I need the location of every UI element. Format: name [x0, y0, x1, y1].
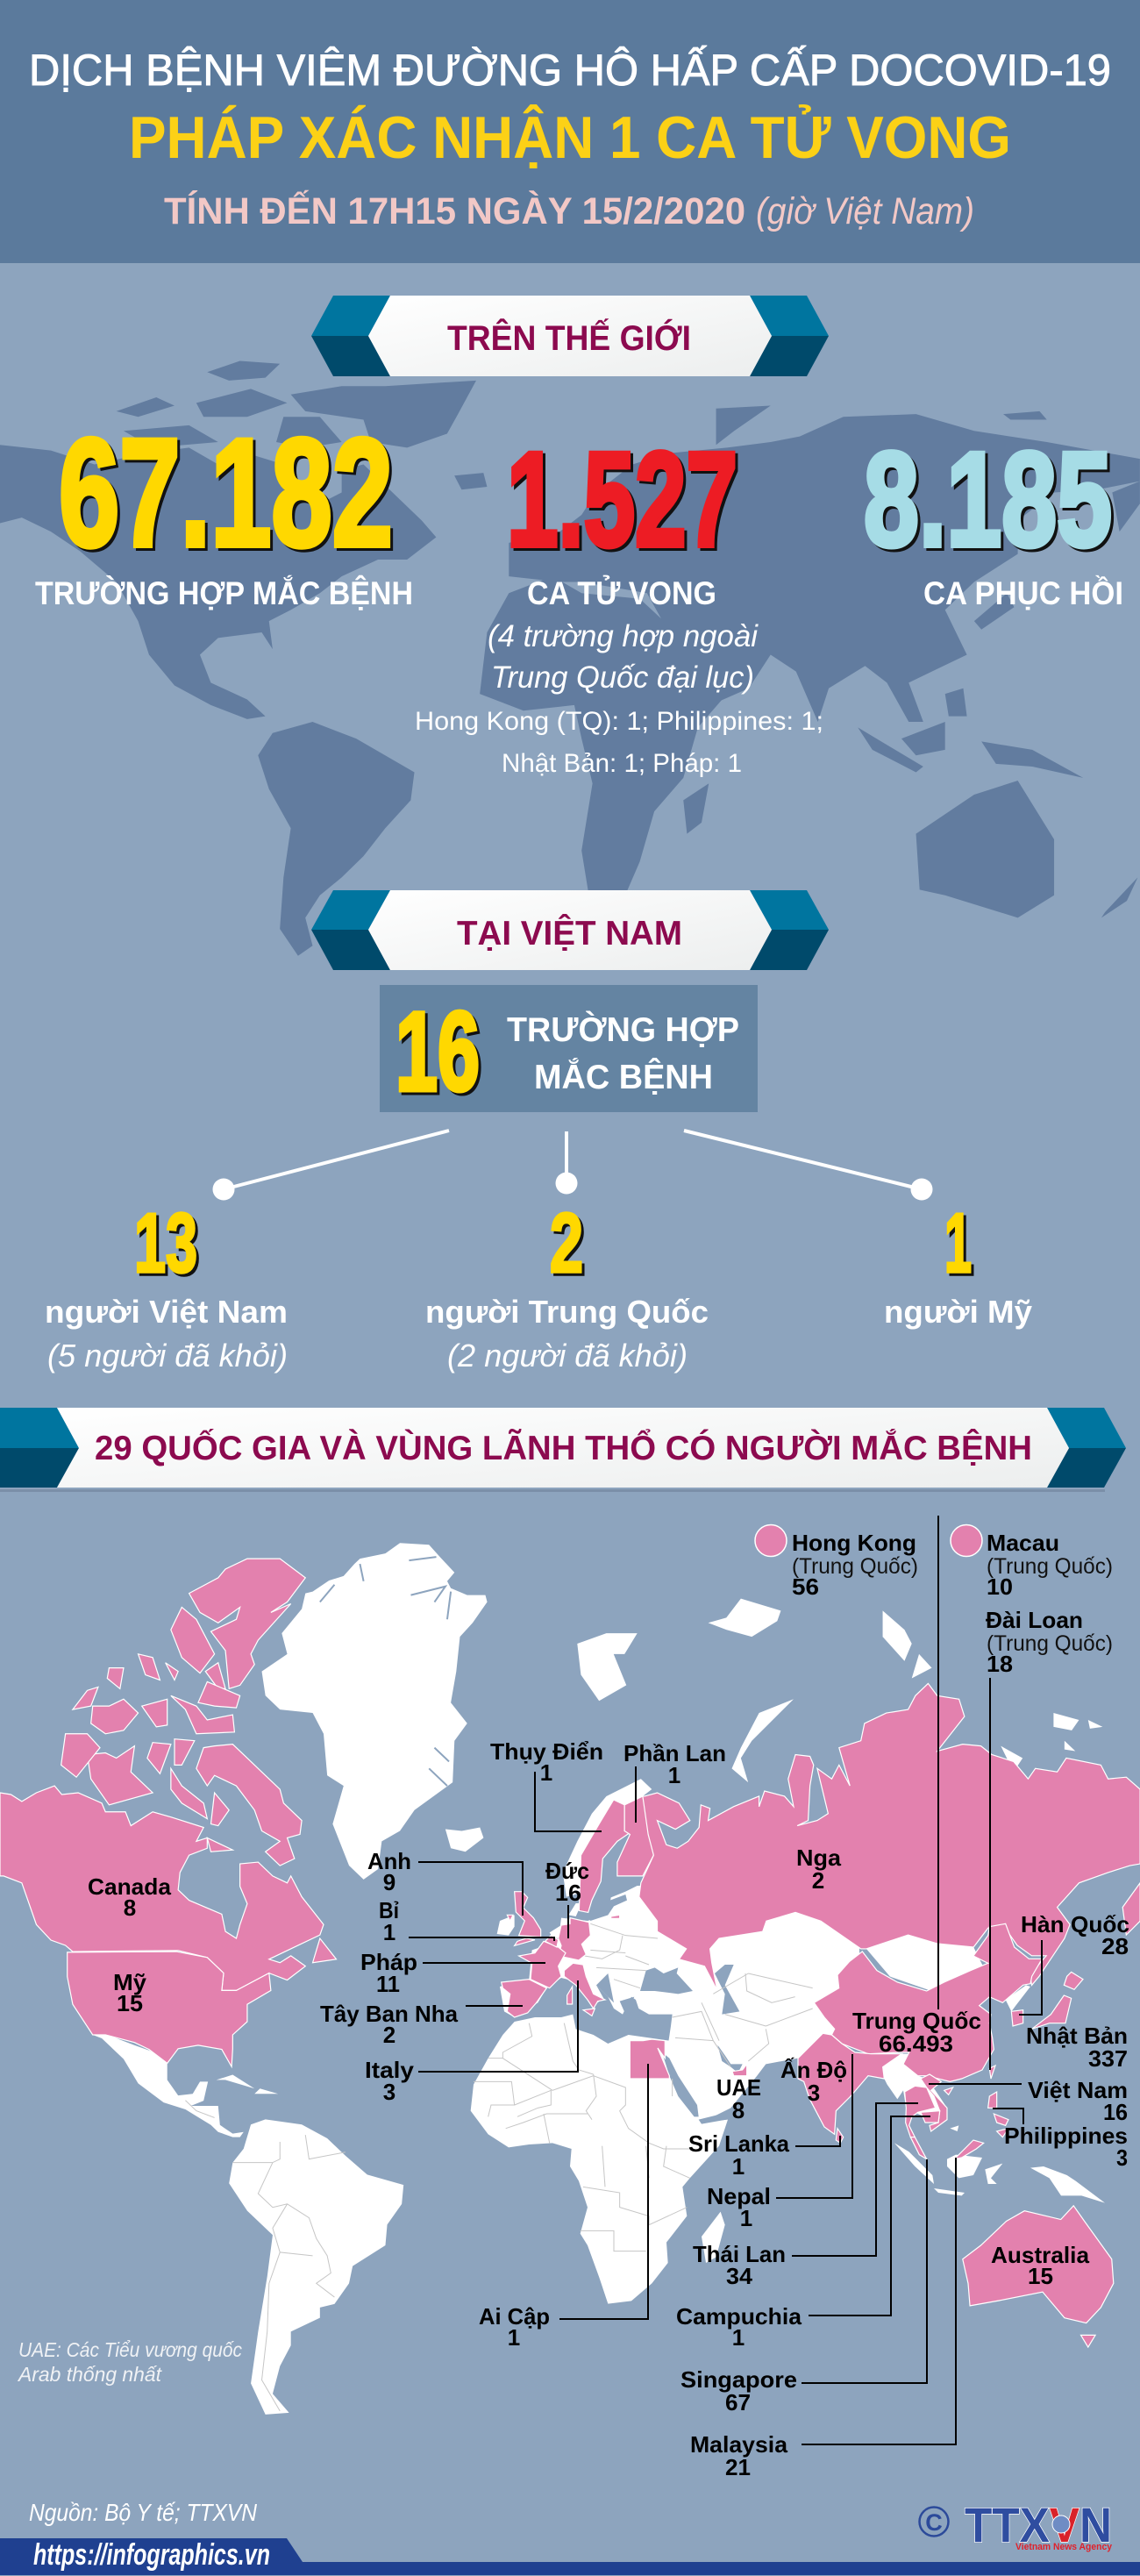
stat: Vietnamese patients: 13: [134, 1196, 197, 1290]
label: Campuchia: [676, 2303, 802, 2351]
label: Bỉ: 1: [383, 1919, 395, 1945]
label: Nepal: [707, 2183, 771, 2231]
label: Tây Ban Nha: 2: [383, 2022, 395, 2048]
label: Bỉ: [379, 1897, 399, 1945]
label: Bỉ: Bỉ: [379, 1897, 399, 1923]
label: Nhật Bản: [1026, 2023, 1128, 2072]
country: Canada: [0, 1559, 337, 1990]
label: Philippines: [1004, 2123, 1128, 2171]
footer bar: [0, 2538, 1140, 2575]
stat: Chinese patients: (2 người đã khỏi): [447, 1338, 688, 1374]
stat: Vietnamese patients: người Việt Nam: [45, 1294, 288, 1330]
label: Ai Cập: 1: [508, 2324, 520, 2351]
label: Mỹ: 15: [117, 1990, 143, 2016]
country: Egypt: [630, 2039, 669, 2079]
label: Ấn Độ: Ấn Độ: [780, 2057, 847, 2083]
banner: Vietnam: TẠI VIỆT NAM: [457, 914, 682, 953]
stat: cases worldwide: TRƯỜNG HỢP MẮC BỆNH: [35, 574, 413, 611]
label: Philippines: Philippines: [1004, 2123, 1128, 2149]
island: Greenland: [262, 1543, 488, 1880]
label: Trung Quốc: Trung Quốc: [852, 2008, 981, 2034]
country: Russia: [639, 1683, 1140, 1990]
label: Trung Quốc: 66.493: [879, 2030, 953, 2057]
country: India: [798, 2033, 901, 2134]
label: Australia: [991, 2242, 1090, 2289]
label: Italy: Italy: [365, 2057, 415, 2083]
label: Ấn Độ: 3: [808, 2080, 820, 2106]
label: Sri Lanka: Sri Lanka: [688, 2130, 790, 2157]
country: UAE: [732, 2064, 747, 2076]
stat: Vietnamese patients: [45, 1196, 288, 1374]
logo: TTXVN: TTXVN: [965, 2497, 1112, 2552]
label: Macau: 10: [987, 1573, 1013, 1600]
footer bar: https://infographics.vn: [33, 2538, 270, 2572]
label: Italy: 3: [383, 2079, 395, 2105]
label: Anh: [367, 1848, 411, 1895]
label: Singapore: [680, 2366, 797, 2415]
label: Hàn Quốc: 28: [1101, 1933, 1129, 1959]
date line: (giờ Việt Nam): [756, 190, 974, 232]
island: Hainan: [944, 2087, 953, 2094]
note: UAE abbreviation: UAE: Các Tiểu vương quốc: [18, 2338, 242, 2361]
label: Phần Lan: [623, 1740, 726, 1788]
label: Mỹ: Mỹ: [113, 1969, 147, 1995]
label: Singapore: Singapore: [680, 2366, 797, 2393]
country: Cambodia: [921, 2111, 940, 2123]
label: UAE: 8: [732, 2097, 745, 2123]
label: Anh: Anh: [367, 1848, 411, 1874]
country: Sri Lanka: [836, 2129, 844, 2143]
banner: world: TRÊN THẾ GIỚI: [447, 318, 691, 358]
leader lines: [409, 1516, 1042, 2444]
territory: Kaliningrad: [611, 1915, 620, 1918]
stat: American patient: [884, 1196, 1032, 1330]
stat: American patient: người Mỹ: [884, 1294, 1032, 1330]
label: Canada: [88, 1873, 172, 1921]
label: Phần Lan: Phần Lan: [623, 1740, 726, 1766]
country: Italy: [564, 1963, 605, 2016]
label: Đức: 16: [555, 1880, 581, 1906]
label: Phần Lan: 1: [668, 1762, 680, 1788]
panel: 16 cases: 16: [395, 989, 480, 1115]
label: Hong Kong: Hong Kong: [792, 1530, 916, 1556]
stat: deaths worldwide: Nhật Bản: 1; Pháp: 1: [502, 749, 742, 778]
country: South Korea: [1011, 2010, 1023, 2026]
label: Macau: (Trung Quốc): [987, 1554, 1113, 1579]
label: Đài Loan: [986, 1607, 1113, 1677]
background world map: [0, 361, 1140, 956]
label: Đức: Đức: [545, 1858, 589, 1884]
label: Tây Ban Nha: Tây Ban Nha: [320, 2001, 459, 2027]
country: Norway: [563, 1779, 652, 1897]
label: Hàn Quốc: [1021, 1911, 1129, 1959]
map: East and Southeast Asia: [798, 1923, 1105, 2203]
label: Pháp: 11: [376, 1971, 400, 1997]
label: UAE: [716, 2074, 761, 2123]
logo: TTXVN: C: [925, 2509, 943, 2536]
stat: recovered worldwide: CA PHỤC HỒI: [923, 574, 1123, 611]
stat: deaths worldwide: Hong Kong (TQ): 1; Philippines: 1;: [415, 707, 823, 736]
label: Campuchia: Campuchia: [676, 2303, 802, 2330]
country: Thailand: [905, 2086, 936, 2137]
country: Philippines: [988, 2092, 1008, 2137]
logo: TTXVN: Vietnam News Agency: [1015, 2542, 1113, 2552]
label: Australia: Australia: [991, 2242, 1090, 2268]
country: Germany: [559, 1918, 590, 1960]
label: Thụy Điển: Thụy Điển: [490, 1738, 603, 1765]
label: Thụy Điển: 1: [540, 1759, 552, 1786]
banner: 29 countries: [0, 1408, 1126, 1492]
label: Malaysia: Malaysia: [690, 2431, 788, 2458]
label: Hong Kong: 56: [792, 1573, 819, 1600]
label: Thái Lan: [693, 2241, 786, 2289]
title line 1: DỊCH BỆNH VIÊM ĐƯỜNG HÔ HẤP CẤP DOCOVID-19: [29, 46, 1111, 95]
stat: deaths worldwide: Trung Quốc đại lục): [491, 660, 754, 695]
label: Macau: Macau: [987, 1530, 1059, 1556]
country: Sweden: [579, 1800, 630, 1912]
label: Thụy Điển: [490, 1738, 603, 1786]
stat: deaths worldwide: 1.527: [507, 425, 737, 574]
country: Mongolia: [866, 1935, 988, 1990]
label: Singapore: 67: [725, 2389, 751, 2415]
stat: deaths worldwide: [415, 425, 823, 778]
country: United Kingdom: [507, 1892, 541, 1945]
country: Vietnam: [921, 2074, 947, 2131]
label: Thái Lan: Thái Lan: [693, 2241, 786, 2267]
label: Nga: [796, 1845, 842, 1894]
label: Ai Cập: Ai Cập: [479, 2303, 550, 2330]
map: Africa, Europe, Middle East base: [471, 1886, 859, 2304]
label: Canada: 8: [124, 1895, 136, 1921]
label: Anh: 9: [383, 1869, 395, 1895]
panel: 16 cases: [380, 985, 758, 1115]
label: Nepal: Nepal: [707, 2183, 771, 2209]
map: North America: [0, 1543, 488, 2137]
label: Sri Lanka: [688, 2130, 790, 2180]
country: Finland: [617, 1796, 653, 1876]
stat: deaths worldwide: (4 trường hợp ngoài: [488, 619, 759, 653]
country: France: [519, 1941, 566, 1988]
banner: 29 countries: 29 QUỐC GIA VÀ VÙNG LÃNH THỔ CÓ NGƯỜI MẮC BỆNH: [95, 1428, 1032, 1467]
country: Japan: [1032, 1972, 1083, 2029]
country: China: [814, 1923, 1042, 2081]
territory: Sakhalin: [1122, 1883, 1140, 1935]
label: Pháp: [360, 1949, 417, 1997]
stat: deaths worldwide: CA TỬ VONG: [527, 574, 716, 611]
label: Mỹ: [113, 1969, 147, 2016]
label: Đức: [545, 1858, 589, 1906]
label: Malaysia: [690, 2431, 788, 2480]
label: Tây Ban Nha: [320, 2001, 459, 2048]
country: Taiwan: [989, 2066, 995, 2079]
label: Hàn Quốc: Hàn Quốc: [1021, 1911, 1129, 1937]
label: Nepal: 1: [740, 2205, 752, 2231]
stat: Chinese patients: 2: [550, 1196, 583, 1290]
label: UAE: UAE: [716, 2074, 761, 2101]
banner: Vietnam: [311, 890, 829, 970]
label: Philippines: 3: [1116, 2144, 1128, 2171]
label: Sri Lanka: 1: [732, 2153, 745, 2180]
label: Ai Cập: [479, 2303, 550, 2351]
source: Nguồn: Bộ Y tế; TTXVN: [29, 2499, 258, 2526]
connector lines: [212, 1131, 933, 1200]
note: UAE abbreviation: [17, 2338, 242, 2386]
label: Pháp: Pháp: [360, 1949, 417, 1975]
label: Nga: 2: [812, 1867, 824, 1894]
region: Borneo and Indonesia: [894, 2125, 1105, 2203]
map: Australia: [963, 2206, 1114, 2347]
panel: 16 cases: MẮC BỆNH: [534, 1058, 713, 1096]
panel: 16 cases: TRƯỜNG HỢP: [507, 1010, 739, 1049]
stat: cases worldwide: 67.182: [59, 408, 393, 579]
label: Thái Lan: 34: [726, 2263, 753, 2289]
label: Australia: 15: [1028, 2263, 1053, 2289]
region: North Korea: [1006, 1985, 1030, 2011]
label: Nga: Nga: [796, 1845, 842, 1871]
label: Việt Nam: Việt Nam: [1028, 2077, 1128, 2103]
label: Ấn Độ: [780, 2057, 847, 2106]
label: Hong Kong: [755, 1524, 918, 1600]
label: Malaysia: 21: [725, 2454, 751, 2480]
date line: TÍNH ĐẾN 17H15 NGÀY 15/2/2020: [164, 190, 745, 232]
country: Malaysia: [910, 2137, 984, 2159]
label: Việt Nam: 16: [1103, 2099, 1128, 2125]
region: mainland Southeast Asia: [868, 2054, 947, 2123]
note: UAE abbreviation: Arab thống nhất: [17, 2363, 163, 2386]
map: Russia and Arctic islands: [563, 1599, 1140, 1990]
header band: [0, 0, 1140, 263]
stat: Chinese patients: người Trung Quốc: [425, 1294, 709, 1330]
country: Belgium: [545, 1936, 559, 1947]
label: Hong Kong: (Trung Quốc): [792, 1554, 918, 1579]
label: Italy: [365, 2057, 415, 2105]
map: South America: [185, 2101, 403, 2415]
label: Đài Loan: (Trung Quốc): [987, 1631, 1113, 1656]
stat: Chinese patients: [425, 1196, 709, 1374]
label: Đài Loan: Đài Loan: [986, 1607, 1083, 1633]
label: Canada: Canada: [88, 1873, 172, 1900]
label: Nhật Bản: Nhật Bản: [1026, 2023, 1128, 2049]
label: Đài Loan: 18: [987, 1651, 1013, 1677]
title line 2: PHÁP XÁC NHẬN 1 CA TỬ VONG: [129, 103, 1011, 171]
banner: world: [311, 296, 829, 376]
label: Việt Nam: [1028, 2077, 1128, 2125]
label: Trung Quốc: [852, 2008, 981, 2057]
label: Campuchia: 1: [732, 2324, 745, 2351]
country: United States: [68, 1952, 271, 2066]
country: Spain: [502, 1980, 546, 2017]
stat: American patient: 1: [944, 1196, 972, 1290]
stat: Vietnamese patients: (5 người đã khỏi): [47, 1338, 288, 1374]
stat: cases worldwide: [35, 408, 413, 611]
label: Nhật Bản: 337: [1088, 2045, 1128, 2072]
label: Macau: [951, 1524, 1113, 1600]
